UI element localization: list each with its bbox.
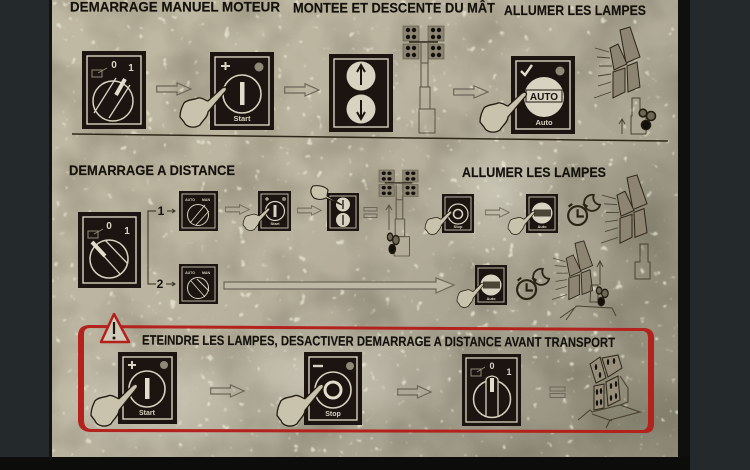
icon: small auto with hand [508, 194, 558, 234]
arrow [225, 205, 249, 214]
icon: warning triangle [101, 314, 129, 342]
icon: start with hand: Start [139, 410, 156, 417]
icon: mast up and down buttons [329, 54, 393, 132]
icon: clock and moon, row 2 [517, 269, 549, 299]
section 1 headings: ALLUMER LES LAMPES [504, 3, 646, 18]
icon: small auto with hand: Auto [537, 224, 547, 229]
icon: large selector switch: 1 [124, 226, 130, 237]
section 1 headings: MONTEE ET DESCENTE DU MÂT [293, 0, 496, 16]
icon: selector at zero [462, 354, 521, 426]
section 1 headings [70, 0, 646, 18]
branch connector with numbers: 2 [157, 277, 164, 291]
icon: small auto/manual selector 2: AUTO [185, 271, 195, 275]
icon: small start with hand [243, 191, 291, 231]
red frame [78, 325, 654, 433]
icon: small start with hand: Start [270, 221, 280, 226]
icon: small mast with winch [379, 170, 418, 256]
arrow [398, 386, 431, 398]
warning heading: ETEINDRE LES LAMPES, DESACTIVER DEMARRAGE A DISTANCE AVANT TRANSPORT [142, 333, 616, 350]
arrow [454, 86, 488, 98]
equals sign [364, 208, 377, 218]
arrow [157, 83, 191, 95]
icon: lit lamps with mast [601, 175, 650, 279]
icon: small up and down with hand [311, 186, 359, 231]
equals sign [550, 387, 565, 398]
icon: lit lamps on trailer [552, 241, 616, 320]
icon: small stop with hand: Stop [454, 224, 463, 229]
icon: selector switch [82, 51, 146, 129]
icon: clock and moon [568, 195, 600, 225]
icon: raised mast [403, 26, 444, 133]
icon: stop with hand: Stop [325, 411, 341, 418]
divider line [72, 134, 668, 141]
icon: small stop with hand [425, 194, 474, 234]
icon: small auto/manual selector 2: MAN [202, 271, 210, 275]
icon: small auto/manual selector 2 [179, 264, 218, 304]
icon: large selector switch [78, 212, 141, 288]
panel: warning before transport [78, 314, 654, 433]
icon: selector at zero: 1 [506, 367, 512, 377]
icon: small auto/manual selector 1 [179, 191, 218, 231]
icon: small auto/manual selector 1: AUTO [185, 198, 195, 202]
branch connector with numbers [148, 204, 175, 291]
icon: large selector switch: 0 [106, 221, 112, 232]
icon: start button with hand: Start [233, 114, 251, 123]
branch connector with numbers: 1 [158, 204, 165, 218]
icon: lit lamps [594, 27, 656, 134]
section 2 lamp heading: ALLUMER LES LAMPES [462, 165, 606, 180]
arrow [297, 206, 321, 215]
icon: auto button with hand: AUTO [530, 92, 558, 103]
long arrow [224, 278, 454, 293]
icon: selector switch: 1 [128, 63, 134, 74]
icon: small auto/manual selector 1: MAN [202, 198, 210, 202]
icon: auto button with hand [480, 56, 575, 134]
icon: start button with hand [180, 52, 274, 130]
icon: selector at zero: 0 [489, 361, 495, 371]
icon: start with hand [91, 352, 177, 426]
arrow [211, 385, 244, 397]
icon: selector switch: 0 [111, 60, 117, 71]
arrow [285, 84, 319, 96]
icon: auto button with hand: Auto [535, 118, 553, 127]
icon: small auto with hand, row 2 [457, 265, 507, 307]
icon: folded lamps [578, 355, 640, 428]
icon: small auto with hand, row 2: Auto [486, 296, 496, 301]
icon: stop with hand [277, 352, 362, 426]
section 2 heading: DEMARRAGE A DISTANCE [69, 163, 235, 178]
arrow [485, 208, 509, 217]
